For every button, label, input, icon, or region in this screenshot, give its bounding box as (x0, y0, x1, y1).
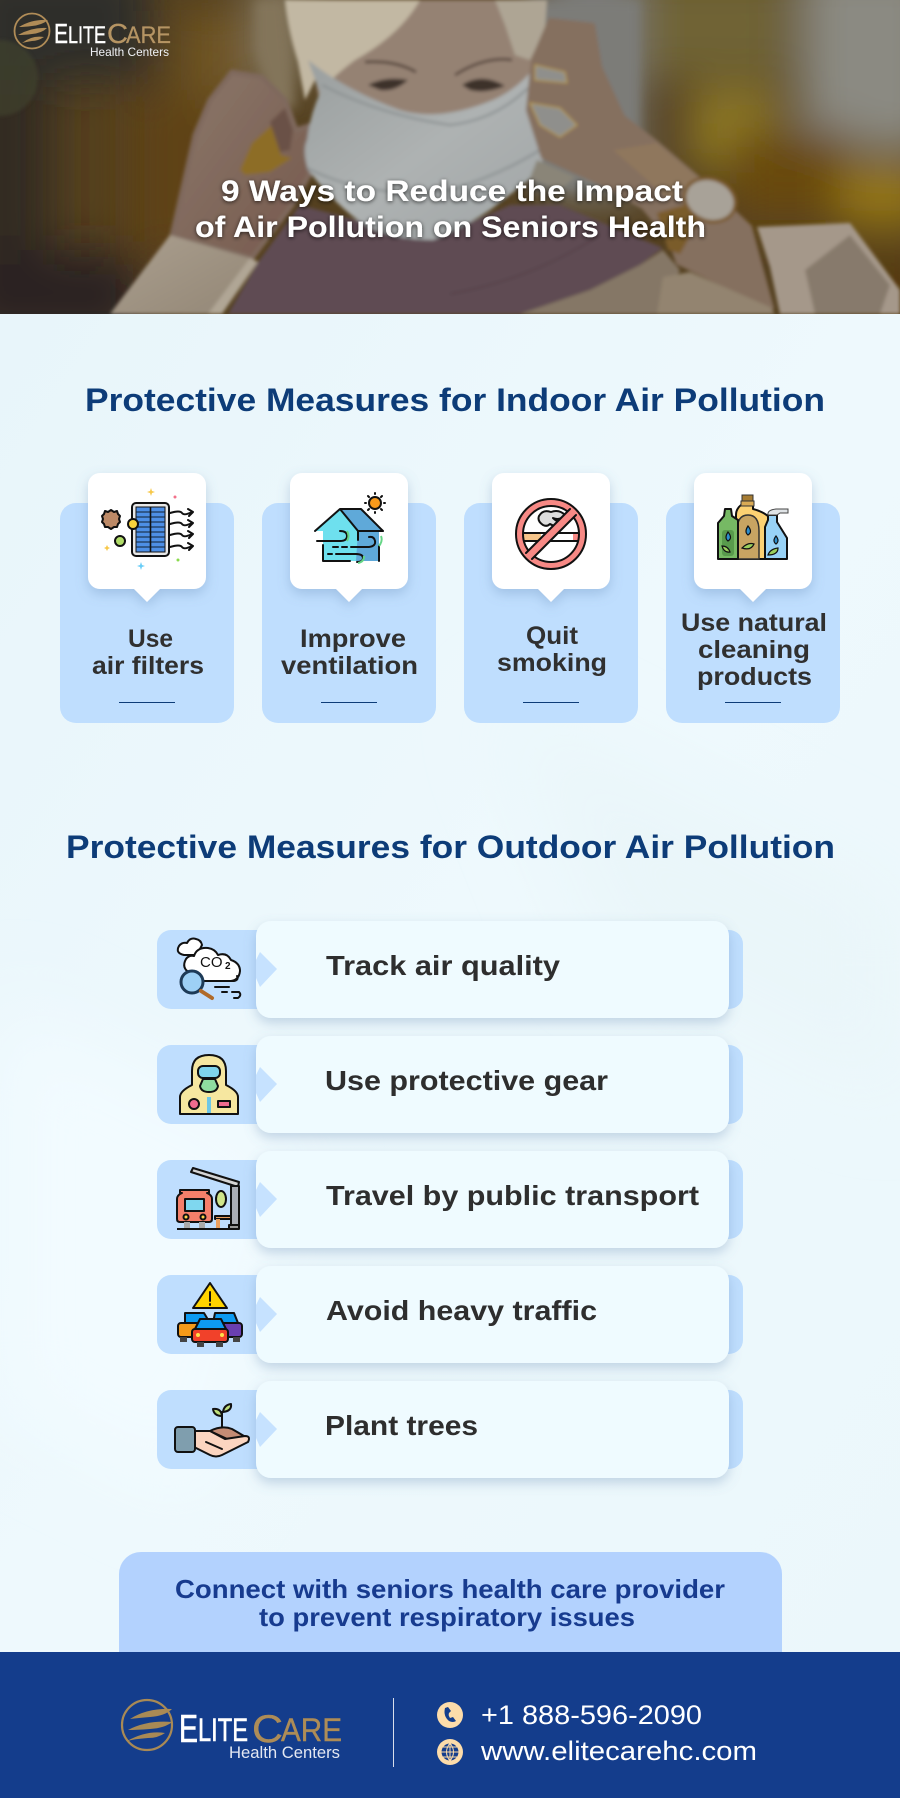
label (681, 609, 827, 691)
footer logo: Health Centers (229, 1743, 340, 1762)
label: Quit (526, 622, 579, 650)
panel: improve ventilation (262, 473, 436, 723)
footer (0, 1652, 900, 1798)
call to action box: to prevent respiratory issues (259, 1602, 635, 1632)
header logo (14, 14, 171, 59)
phone number: +1 888-596-2090 (481, 1700, 702, 1730)
label: Use protective gear (325, 1065, 608, 1096)
right coat (757, 223, 900, 314)
panel: use air filters (60, 473, 234, 723)
icon: hand holding seedling (175, 1404, 249, 1456)
label: Avoid heavy traffic (326, 1295, 597, 1326)
footer logo: C (252, 1708, 283, 1751)
row: track air quality (157, 921, 743, 1018)
right hand and forearm (528, 20, 772, 308)
footer logo: E (179, 1708, 198, 1751)
call to action box (119, 1552, 782, 1652)
icon: house with wind (315, 493, 385, 563)
header logo: Health Centers (90, 45, 169, 59)
icon: CO2 cloud and magnifier: CO (200, 954, 222, 971)
label: ventilation (281, 652, 418, 680)
heading: outdoor measures: Protective Measures for Outdoor Air Pollution (66, 829, 835, 865)
row: use protective gear (157, 1036, 743, 1133)
icon: protective suit (180, 1055, 238, 1114)
icon: traffic warning (178, 1283, 242, 1347)
hero title: 9 Ways to Reduce the Impact (221, 175, 683, 208)
icon: air filter (102, 488, 193, 570)
header logo: LITE (68, 22, 106, 49)
icon: phone (437, 1702, 463, 1728)
panel: quit smoking (464, 473, 638, 723)
icon: cleaning bottles (718, 495, 788, 559)
background visible near right hand (530, 0, 640, 190)
panel: use natural cleaning products (666, 473, 840, 723)
mask (305, 60, 547, 240)
row: travel by public transport (157, 1151, 743, 1248)
label: products (697, 663, 812, 691)
heading: indoor measures: Protective Measures for Indoor Air Pollution (85, 382, 825, 418)
hero title (195, 175, 706, 244)
background below mask (530, 160, 572, 187)
label (281, 625, 418, 680)
header logo: E (54, 18, 68, 49)
label: cleaning (698, 636, 810, 664)
hair (255, 0, 295, 110)
row: avoid heavy traffic (157, 1266, 743, 1363)
footer logo (122, 1700, 342, 1762)
page background (0, 314, 900, 1652)
footer logo: LITE (198, 1712, 248, 1748)
scarf (228, 205, 663, 314)
left cuff (110, 235, 250, 314)
label (497, 622, 607, 677)
row: plant trees (157, 1381, 743, 1478)
icon: bus stop (177, 1168, 239, 1229)
icon: globe (437, 1739, 463, 1765)
label (92, 625, 204, 680)
icon: CO2 cloud and magnifier: 2 (225, 961, 231, 972)
label: Travel by public transport (326, 1180, 699, 1211)
hero photo: senior woman putting on a face mask (0, 0, 900, 340)
label: Improve (300, 625, 406, 653)
label: Plant trees (325, 1410, 478, 1441)
label: Use natural (681, 609, 827, 637)
footer logo: ARE (281, 1712, 342, 1748)
left hand (172, 72, 312, 258)
call to action box: Connect with seniors health care provider (175, 1574, 725, 1604)
watch band and watch (657, 204, 698, 254)
label: air filters (92, 652, 204, 680)
coat under scarf (520, 250, 680, 314)
label: Track air quality (326, 950, 560, 981)
header logo: ARE (126, 22, 171, 49)
icon: CO2 cloud and magnifier (178, 938, 240, 998)
hero title: of Air Pollution on Seniors Health (195, 211, 706, 244)
icon: no smoking (516, 499, 586, 569)
website: www.elitecarehc.com (480, 1736, 757, 1766)
label: Use (128, 625, 173, 653)
header logo: C (107, 18, 128, 49)
face (314, 0, 532, 116)
label: smoking (497, 649, 607, 677)
